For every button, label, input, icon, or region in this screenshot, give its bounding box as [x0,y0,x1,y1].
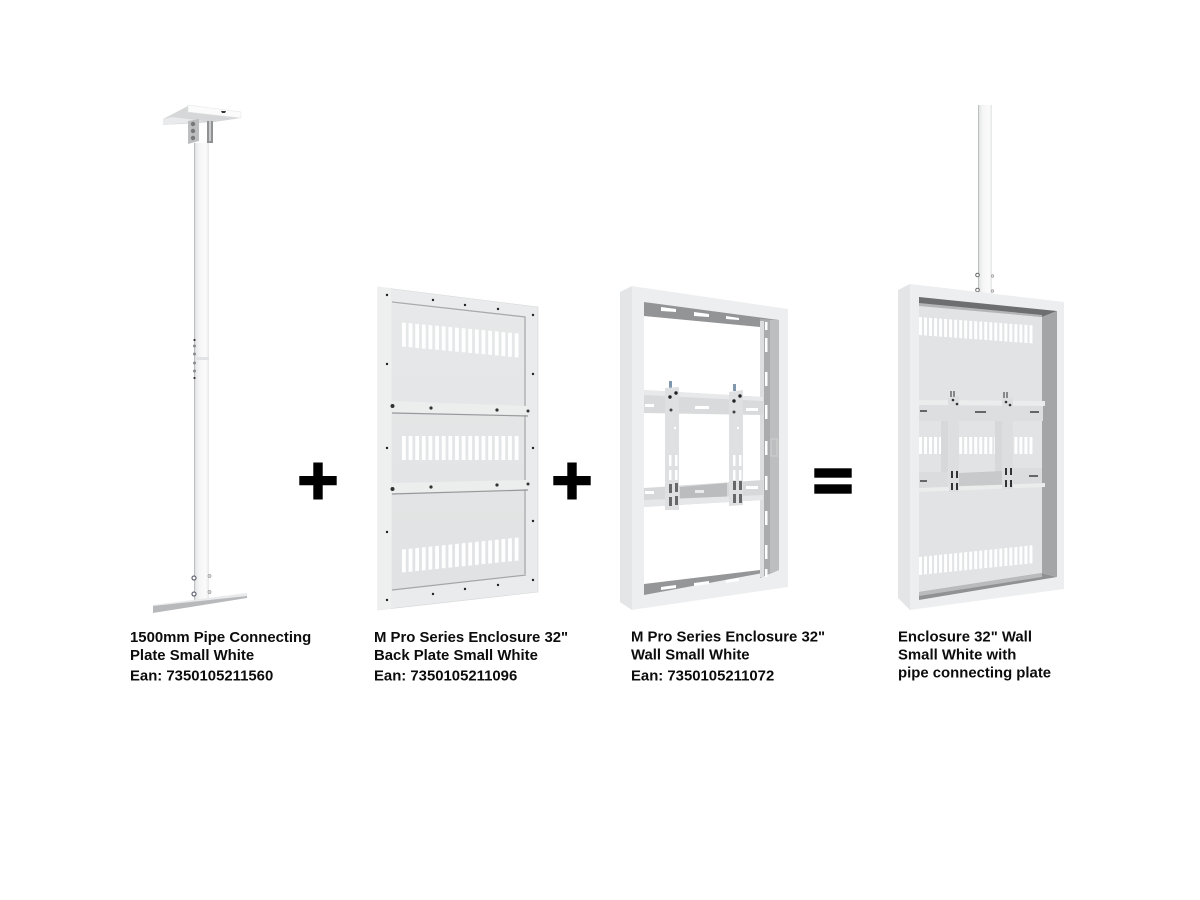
interior bottom wall [919,573,1057,600]
lower rail [919,468,1045,492]
back panel [919,305,1042,592]
upper rail [644,390,763,415]
plus sign 1 [299,462,337,500]
product: assembled enclosure [898,105,1064,610]
lower rail [644,480,763,507]
interior top wall [644,302,779,327]
right wall latch [771,439,777,456]
caption: wall: Wall Small White [631,648,750,664]
foot plate [153,593,247,613]
left vertical bracket [665,381,679,510]
right vertical bracket [729,384,743,506]
right vertical bracket [1002,392,1013,489]
product: back plate [378,287,538,610]
caption: assembled enclosure: Small White with [898,648,1016,664]
upper rail [919,400,1045,421]
caption: back plate: M Pro Series Enclosure 32" [374,630,568,646]
vent slots [919,326,1034,566]
front frame [910,284,1064,610]
pipe [194,143,209,601]
caption: wall: M Pro Series Enclosure 32" [631,630,825,646]
left vertical bracket [948,391,959,492]
caption: wall: Ean: 7350105211072 [631,668,774,684]
interior top wall [919,297,1057,317]
left flange edge [378,287,391,610]
caption: pipe connecting plate: Ean: 7350105211560 [130,668,273,684]
caption: assembled enclosure: Enclosure 32" Wall [898,630,1032,646]
caption: assembled enclosure: pipe connecting plate [898,666,1051,682]
inner panel [392,304,526,590]
ceiling plate [163,105,241,125]
top pipe [978,105,992,295]
outer side [620,286,632,610]
pipe bracket [188,119,213,144]
rails [390,401,530,494]
adjustment bolts [192,339,211,596]
outer side [898,284,910,610]
interior right wall [1042,311,1057,577]
vent slots [402,335,518,561]
caption: pipe connecting plate: Plate Small White [130,648,254,664]
interior right wall [760,319,779,578]
plus sign 2 [553,462,591,500]
rear vertical brackets [941,420,1002,473]
top and bottom wall slots [661,307,739,590]
caption: back plate: Back Plate Small White [374,648,538,664]
pipe bolts [976,273,994,292]
caption: pipe connecting plate: 1500mm Pipe Connecting [130,630,311,646]
outer flange [378,287,538,610]
product: pipe connecting plate [153,105,247,613]
mounting holes [386,294,534,601]
product: wall frame [620,286,788,610]
interior bottom wall [644,570,779,595]
pipe collar [196,357,209,360]
front frame [632,286,788,610]
equals sign [814,468,852,494]
right wall slots [765,322,768,577]
caption: back plate: Ean: 7350105211096 [374,668,517,684]
